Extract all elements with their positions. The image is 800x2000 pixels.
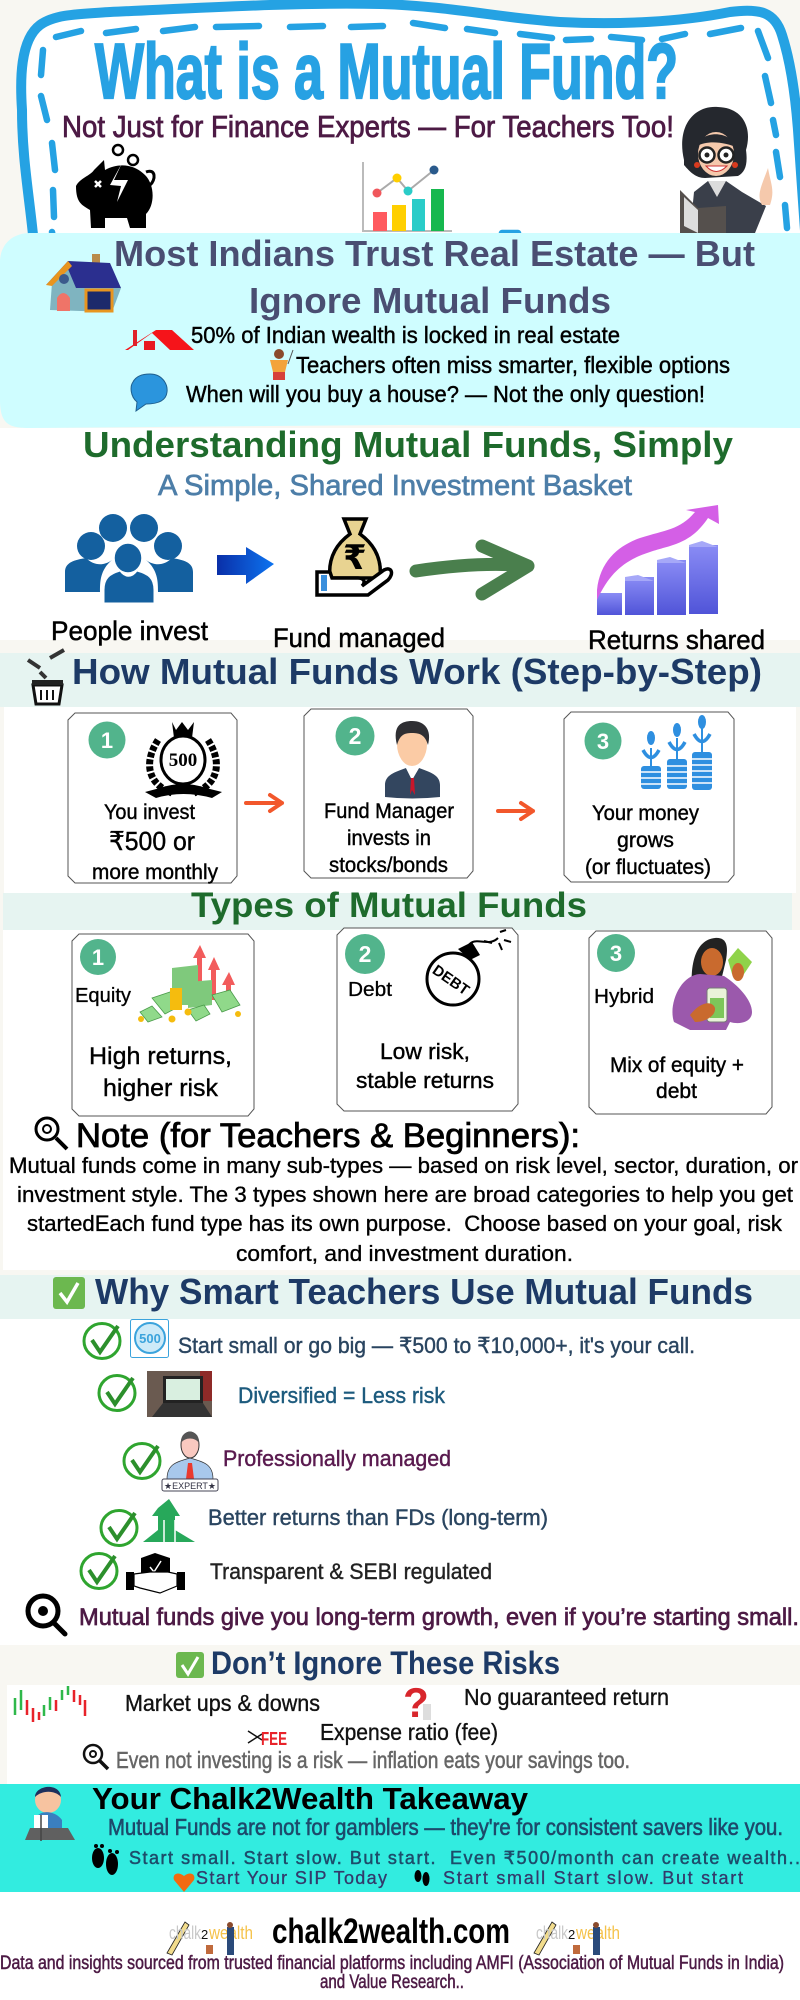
text: start small repeat: Start small Start slow. But start [443, 1868, 743, 1888]
icon: candlestick chart [15, 1686, 85, 1722]
panel: risks [7, 1645, 800, 1784]
icon: 500 laurel: 500 [169, 750, 197, 771]
badge: hybrid: 3 [610, 941, 622, 966]
badge: equity: 1 [92, 945, 104, 970]
icon: speaker at podium [25, 1787, 75, 1841]
card: hybrid [589, 931, 772, 1114]
panel: types of mutual funds [3, 886, 800, 1270]
source note [0, 1953, 784, 1993]
arrow: step 2 to 3 [498, 803, 533, 819]
line: question: When will you buy a house? — Not the only question! [186, 381, 705, 407]
text: step 1: ₹500 or [109, 826, 195, 856]
icon: debt bomb [427, 930, 511, 1005]
card: equity [72, 934, 254, 1116]
card: step 1 [68, 713, 237, 884]
badge: debt: 2 [359, 941, 371, 967]
text: step 3: (or fluctuates) [585, 856, 711, 879]
icon: house [46, 254, 121, 312]
subtitle: Not Just for Finance Experts — For Teachers Too! [62, 109, 674, 144]
row: professionally managed [124, 1432, 451, 1491]
text: debt: stable returns [356, 1068, 494, 1093]
row: better returns: Better returns than FDs (long-term) [208, 1505, 548, 1530]
logo: right [534, 1922, 620, 1955]
icon: 500 laurel [145, 722, 222, 798]
text: hybrid [610, 1054, 744, 1103]
text: step 2: stocks/bonds [329, 854, 448, 877]
panel: title header [21, 4, 800, 245]
text block: note paragraph [9, 1153, 798, 1266]
text: step 1 [92, 801, 218, 884]
badge: equity [80, 939, 116, 975]
icon: fee scissors: FEE [261, 1729, 287, 1749]
icon: speech bubble [131, 374, 167, 411]
row: start small [84, 1320, 695, 1358]
callout: long-term growth: Mutual funds give you long-term growth, even if you’re starting small. [79, 1604, 799, 1631]
heading: why smart teachers: Why Smart Teachers Use Mutual Funds [95, 1271, 753, 1312]
line: teachers: Teachers often miss smarter, flexible options [296, 352, 730, 378]
label: debt: Debt [348, 979, 392, 1001]
icon: question mark figure: ? [403, 1679, 429, 1726]
logo: right: wealth [575, 1923, 620, 1943]
site name: chalk2wealth.com [272, 1912, 510, 1951]
icon: people group [65, 514, 193, 603]
icon: red roof [125, 330, 194, 350]
logo: right: 2 [568, 1927, 575, 1942]
text: step 1: You invest [104, 801, 195, 824]
label: equity: Equity [75, 985, 131, 1007]
text: step 2 [324, 800, 454, 877]
row: diversified: Diversified = Less risk [238, 1383, 446, 1408]
icon: fee scissors [248, 1729, 287, 1749]
row: better returns [101, 1499, 548, 1546]
icon: growth chart [363, 162, 452, 231]
logo: left [167, 1922, 253, 1955]
badge 3: 3 [597, 729, 609, 754]
text: equity: High returns, [89, 1043, 232, 1070]
heading: understanding: Understanding Mutual Funds, Simply [83, 424, 733, 465]
text: debt [356, 1039, 494, 1093]
logo: right: chalk [536, 1923, 569, 1943]
row: start small: Start small or go big — ₹500 to ₹10,000+, it's your call. [178, 1333, 695, 1358]
callout: long-term growth [28, 1596, 799, 1634]
arrow: step 1 to 2 [246, 795, 282, 811]
icon: broken piggy bank [76, 145, 154, 228]
text: step 1: more monthly [92, 861, 218, 884]
arrow: green [416, 546, 528, 594]
label: returns shared: Returns shared [588, 625, 765, 655]
icon: basket [28, 650, 64, 704]
logo: left: chalk [169, 1923, 202, 1943]
arrow: blue [217, 547, 274, 584]
icon: footprints [92, 1844, 119, 1875]
icon: rupee money bag in hand: ₹ [343, 539, 367, 577]
text: inflation note: Even not investing is a risk — inflation eats your savings too. [116, 1747, 630, 1773]
icon: debt bomb: DEBT [429, 962, 472, 999]
source note: and Value Research.. [320, 1972, 464, 1993]
heading: most Indians: Most Indians Trust Real Estate — But [114, 233, 755, 274]
row: professionally managed: ★EXPERT★ [164, 1481, 216, 1491]
text block: note paragraph: investment style. The 3 types shown here are broad categories to help you get [17, 1182, 793, 1207]
row: transparent [81, 1553, 492, 1593]
logo: left: wealth [208, 1923, 253, 1943]
label: fund managed: Fund managed [273, 623, 445, 653]
card: debt [337, 928, 518, 1111]
panel: how mutual funds work [0, 650, 800, 893]
icon: small footprints [414, 1870, 430, 1886]
icon: rising bars with arrow [597, 505, 719, 615]
icon: magnifier note [36, 1118, 67, 1149]
badge: debt [345, 934, 385, 974]
card: step 2 [304, 709, 473, 878]
text block: note paragraph: startedEach fund type has its own purpose. Choose based on your goal, risk [27, 1211, 783, 1236]
icon: rupee money bag in hand [317, 519, 391, 595]
icon: green check box [53, 1277, 85, 1309]
badge 3 [584, 722, 622, 760]
row: start small: 500 [139, 1331, 161, 1346]
label: no guarantee: No guaranteed return [464, 1684, 669, 1710]
text: step 2: invests in [347, 827, 431, 850]
badge 1: 1 [101, 728, 113, 753]
row: transparent: Transparent & SEBI regulated [210, 1559, 492, 1584]
text: debt: Low risk, [380, 1039, 470, 1064]
icon: woman with money jar [672, 938, 752, 1030]
panel: real estate [0, 233, 800, 428]
icon: fund manager [385, 721, 440, 798]
text: step 3: grows [617, 829, 674, 852]
heading: how mutual funds work: How Mutual Funds Work (Step-by-Step) [72, 651, 762, 692]
logo: left: 2 [201, 1927, 208, 1942]
text: hybrid: debt [656, 1080, 697, 1103]
icon: small teacher [270, 349, 293, 380]
line: wealth: 50% of Indian wealth is locked in real estate [191, 322, 620, 348]
row: diversified [99, 1371, 446, 1417]
heading: note: Note (for Teachers & Beginners): [76, 1117, 580, 1155]
panel: understanding mutual funds [51, 424, 765, 655]
heading: types: Types of Mutual Funds [191, 886, 587, 925]
icon: orange heart [174, 1873, 194, 1892]
text: start small: Start small. Start slow. But start. Even ₹500/month can create wealth.. [129, 1848, 800, 1868]
subheading: basket: A Simple, Shared Investment Basket [158, 470, 632, 502]
badge 1 [88, 722, 126, 758]
text: start your SIP: Start Your SIP Today [196, 1868, 387, 1888]
text: equity: higher risk [103, 1075, 219, 1102]
badge 2 [336, 716, 374, 756]
label: people invest: People invest [51, 616, 208, 646]
heading line two: Ignore Mutual Funds [249, 280, 611, 321]
badge: hybrid [597, 934, 635, 972]
icon: teacher character [680, 107, 772, 233]
text: step 2: Fund Manager [324, 800, 454, 823]
text block: note paragraph: comfort, and investment duration. [236, 1241, 573, 1266]
label: expense ratio: Expense ratio (fee) [320, 1719, 498, 1745]
panel: takeaway [0, 1781, 800, 1892]
icon: magnifier [84, 1745, 108, 1769]
text: equity [89, 1043, 232, 1102]
icon: money stacks and arrows [138, 945, 241, 1022]
panel: why smart teachers [0, 1271, 800, 1645]
label: hybrid: Hybrid [594, 986, 654, 1008]
card: step 3 [564, 712, 734, 882]
label: market ups: Market ups & downs [125, 1690, 320, 1716]
text block: note paragraph: Mutual funds come in many sub-types — based on risk level, sector, duration, or [9, 1153, 798, 1178]
text: step 3 [585, 802, 711, 879]
heading: takeaway: Your Chalk2Wealth Takeaway [92, 1781, 529, 1816]
panel: footer [0, 1892, 800, 2000]
row: professionally managed: Professionally managed [223, 1446, 451, 1471]
text: step 3: Your money [592, 802, 699, 825]
icon: coin plants [641, 715, 712, 790]
badge 2: 2 [349, 723, 361, 749]
heading: risks: Don’t Ignore These Risks [211, 1645, 560, 1681]
text: hybrid: Mix of equity + [610, 1054, 744, 1077]
icon: green check box [176, 1652, 204, 1678]
